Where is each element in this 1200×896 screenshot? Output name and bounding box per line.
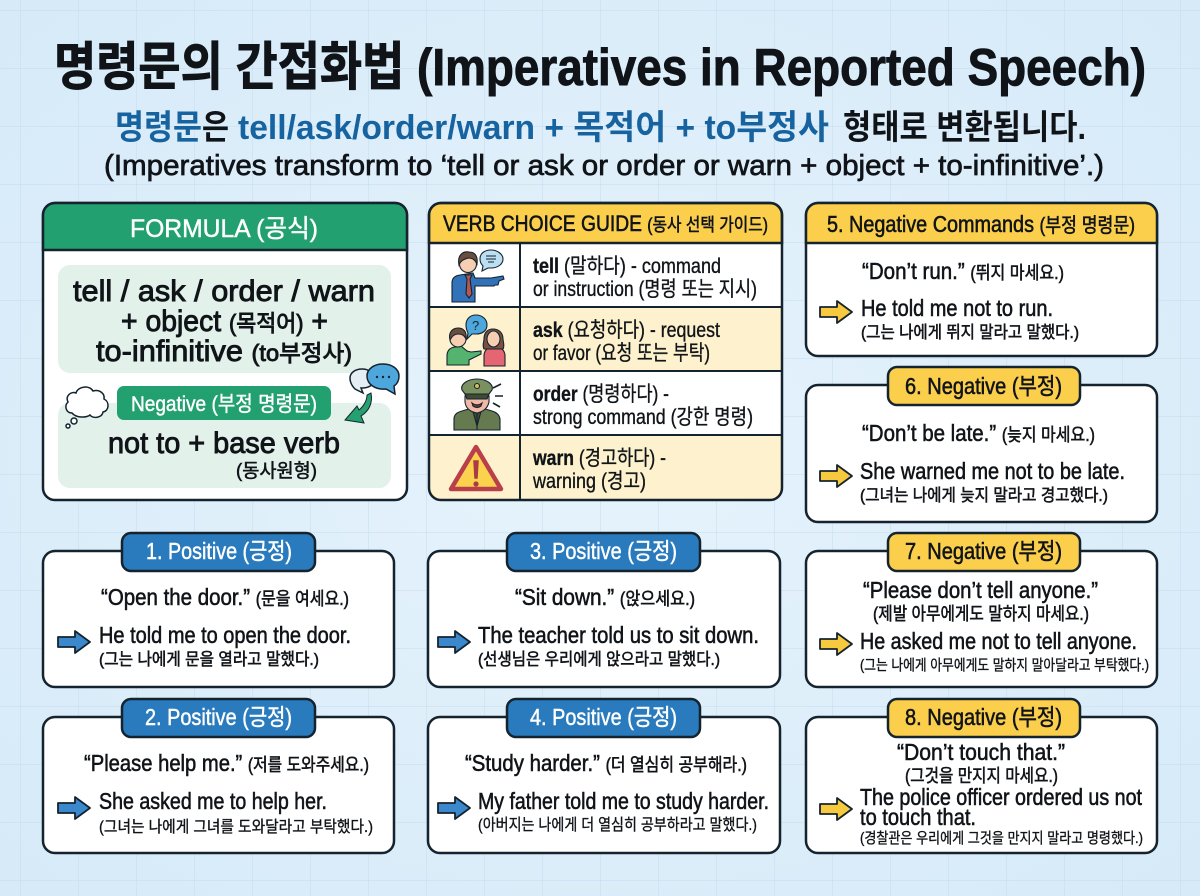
card 4 badge: 4. Positive (긍정)	[530, 704, 677, 730]
card 6 badge: 6. Negative (부정)	[905, 373, 1062, 399]
card 8: negative	[806, 699, 1157, 853]
panel: formula	[43, 203, 407, 500]
card 7 badge: 7. Negative (부정)	[905, 538, 1062, 564]
card 8 quote	[897, 739, 1065, 786]
card 4 answer: My father told me to study harder.	[478, 788, 769, 814]
icon: order, officer	[454, 379, 503, 430]
card 7 badge	[888, 533, 1080, 571]
card 2 answer	[99, 788, 373, 836]
row: warn: warn (경고하다) -	[532, 447, 666, 470]
arrow	[820, 301, 852, 323]
card 6: negative	[806, 367, 1157, 522]
verb guide header: VERB CHOICE GUIDE (동사 선택 가이드)	[443, 211, 768, 236]
card 3 quote: “Sit down.” (앉으세요.)	[515, 584, 695, 610]
card 2 answer: She asked me to help her.	[99, 788, 327, 814]
panel: verb choice guide	[429, 203, 782, 500]
arrow	[58, 631, 90, 653]
row: order	[533, 383, 753, 429]
card 4 quote: “Study harder.” (더 열심히 공부해라.)	[465, 750, 747, 776]
card 3 answer: The teacher told us to sit down.	[478, 622, 759, 648]
card 8 answer: (경찰관은 우리에게 그것을 만지지 말라고 명령했다.)	[860, 830, 1143, 847]
arrow	[820, 633, 852, 655]
negative box: not to + base verb	[108, 427, 340, 460]
subtitle: Korean rule: 명령문	[115, 109, 202, 147]
arrow	[820, 798, 852, 820]
card 7 quote	[863, 577, 1098, 624]
card 8 badge	[888, 699, 1080, 737]
icon: ask, two people	[447, 315, 505, 366]
card 8 answer: to touch that.	[860, 804, 976, 830]
card 6 answer: She warned me not to be late.	[860, 458, 1125, 484]
row: ask: ask (요청하다) - request	[533, 319, 720, 342]
card 5 answer: He told me not to run.	[861, 295, 1053, 321]
card 5 quote: “Don’t run.” (뛰지 마세요.)	[862, 258, 1064, 284]
row: warn: warning (경고)	[532, 470, 646, 493]
card 7 answer	[860, 628, 1149, 674]
negative badge: Negative (부정 명령문)	[131, 393, 317, 416]
card 7 answer: He asked me not to tell anyone.	[860, 628, 1137, 654]
card 1 quote: “Open the door.” (문을 여세요.)	[101, 584, 349, 610]
arrow: formula to negative	[345, 393, 372, 423]
card 5 answer: (그는 나에게 뛰지 말라고 말했다.)	[861, 323, 1079, 342]
card 1: positive	[43, 533, 394, 687]
row: ask: or favor (요청 또는 부탁)	[533, 342, 710, 365]
arrow	[820, 465, 852, 487]
card 6 answer	[860, 458, 1125, 505]
card 7: negative	[806, 533, 1157, 687]
negative box: (동사원형)	[236, 460, 317, 482]
card 6 quote: “Don’t be late.” (늦지 마세요.)	[862, 420, 1095, 446]
row: tell	[533, 255, 757, 301]
card 3 badge	[507, 533, 700, 571]
card 8 quote: (그것을 만지지 마세요.)	[905, 766, 1058, 786]
card 8 quote: “Don’t touch that.”	[897, 739, 1065, 765]
icon: warn, warning triangle	[451, 447, 501, 489]
card 3 badge: 3. Positive (긍정)	[530, 538, 677, 564]
card 2 answer: (그녀는 나에게 그녀를 도와달라고 부탁했다.)	[99, 818, 373, 836]
card 3: positive	[428, 533, 780, 687]
icon: thought cloud	[66, 387, 108, 428]
card 1 answer	[99, 622, 351, 669]
row: tell: or instruction (명령 또는 지시)	[533, 278, 757, 301]
row: ask	[533, 319, 720, 365]
card 4 answer: (아버지는 나에게 더 열심히 공부하라고 말했다.)	[478, 816, 757, 834]
card 5 header: 5. Negative Commands (부정 명령문)	[827, 211, 1135, 237]
verb guide header	[429, 203, 782, 243]
card 1 answer: He told me to open the door.	[99, 622, 351, 648]
negative box	[58, 403, 391, 488]
formula box: to-infinitive (to부정사)	[96, 335, 352, 368]
icon: speech bubbles	[350, 364, 399, 394]
subtitle: Korean rule: 형태로 변환됩니다.	[843, 109, 1086, 147]
icon: ask, two people: ?	[472, 318, 479, 333]
card 5: negative commands	[806, 203, 1157, 356]
icon: tell, man pointing	[452, 250, 504, 302]
arrow	[58, 797, 90, 819]
formula box: tell / ask / order / warn	[73, 275, 375, 308]
subtitle: Korean rule	[115, 109, 1086, 147]
card 7 answer: (그는 나에게 아무에게도 말하지 말아달라고 부탁했다.)	[860, 657, 1149, 674]
card 8 badge: 8. Negative (부정)	[905, 704, 1062, 730]
card 2 quote: “Please help me.” (저를 도와주세요.)	[84, 750, 369, 776]
formula header	[43, 203, 407, 250]
row backgrounds	[430, 307, 781, 499]
row: tell: tell (말하다) - command	[533, 255, 721, 278]
formula box	[58, 265, 391, 373]
card 7 quote: “Please don’t tell anyone.”	[863, 577, 1098, 603]
subtitle: English translation: (Imperatives transform to ‘tell or ask or order or warn + object + to-infinitive’.)	[104, 150, 1104, 182]
negative badge	[117, 386, 331, 420]
card 8 answer	[860, 784, 1143, 847]
row: order: order (명령하다) -	[533, 383, 669, 406]
row: order: strong command (강한 명령)	[533, 406, 753, 429]
card 8 answer: The police officer ordered us not	[860, 784, 1143, 810]
card 7 quote: (제발 아무에게도 말하지 마세요.)	[873, 604, 1089, 624]
card 5 header	[806, 203, 1157, 243]
arrow	[438, 631, 470, 653]
arrow	[438, 797, 470, 819]
card 5 answer	[861, 295, 1079, 342]
card 3 answer: (선생님은 우리에게 앉으라고 말했다.)	[478, 650, 720, 669]
card 3 answer	[478, 622, 759, 669]
card 4 badge	[507, 699, 700, 737]
card 1 badge: 1. Positive (긍정)	[146, 538, 292, 564]
row: warn	[532, 447, 666, 493]
card 1 badge	[122, 533, 315, 571]
card 2: positive	[43, 699, 394, 853]
card 2 badge	[122, 699, 315, 737]
card 6 badge	[888, 367, 1080, 405]
formula header: FORMULA (공식)	[130, 215, 318, 243]
card 6 answer: (그녀는 나에게 늦지 말라고 경고했다.)	[860, 486, 1108, 505]
subtitle: Korean rule: 은	[202, 109, 229, 147]
formula box: + object (목적어) +	[121, 305, 328, 338]
card 4: positive	[428, 699, 780, 853]
card 4 answer	[478, 788, 769, 834]
subtitle: Korean rule: tell/ask/order/warn + 목적어 + to부정사	[238, 109, 829, 147]
card 1 answer: (그는 나에게 문을 열라고 말했다.)	[99, 650, 319, 669]
card 2 badge: 2. Positive (긍정)	[145, 704, 292, 730]
